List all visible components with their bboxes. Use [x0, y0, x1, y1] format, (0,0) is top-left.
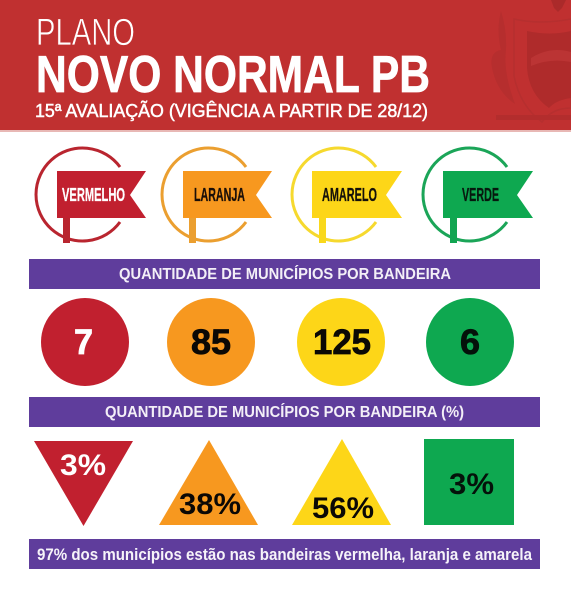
inverted triangle: vermelho 3%: 3% [60, 449, 106, 482]
icon: state coat of arms watermark [491, 0, 571, 122]
triangle: amarelo 56% [292, 439, 391, 525]
count circle: verde 6: 6 [460, 323, 480, 362]
square: verde 3%: 3% [449, 468, 494, 501]
count circle: verde 6 [426, 298, 514, 386]
triangle: laranja 38% [159, 440, 258, 525]
heading: PLANO: PLANO [36, 12, 135, 54]
triangle: amarelo 56%: 56% [312, 492, 374, 525]
flag badge: vermelho: VERMELHO [62, 185, 125, 205]
flag badge: amarelo [292, 148, 402, 243]
heading: NOVO NORMAL PB: NOVO NORMAL PB [36, 46, 430, 104]
section bar: percentage of municipalities: QUANTIDADE DE MUNICÍPIOS POR BANDEIRA (%) [105, 404, 464, 421]
subheading: evaluation date: 15ª AVALIAÇÃO (VIGÊNCIA A PARTIR DE 28/12) [35, 100, 428, 121]
flag badge: verde [423, 148, 533, 243]
flag badge: laranja: LARANJA [194, 185, 245, 205]
flag badge: laranja [162, 148, 272, 243]
count circle: vermelho 7: 7 [74, 323, 93, 362]
count circle: laranja 85 [167, 298, 255, 386]
count circle: vermelho 7 [41, 298, 129, 386]
callout bar: 97% summary [29, 539, 540, 569]
callout bar: 97% summary: 97% dos municípios estão nas bandeiras vermelha, laranja e amarela [37, 546, 533, 564]
square: verde 3% [424, 439, 514, 525]
section bar: count of municipalities: QUANTIDADE DE MUNICÍPIOS POR BANDEIRA [119, 266, 451, 283]
header banner [0, 0, 571, 132]
count circle: laranja 85: 85 [191, 323, 231, 362]
count circle: amarelo 125: 125 [313, 323, 371, 362]
section bar: percentage of municipalities [29, 397, 540, 427]
flag badge: verde: VERDE [462, 185, 499, 205]
count circle: amarelo 125 [297, 298, 385, 386]
triangle: laranja 38%: 38% [179, 488, 241, 521]
inverted triangle: vermelho 3% [34, 441, 133, 526]
flag badge: amarelo: AMARELO [322, 185, 377, 205]
flag badge: vermelho [36, 148, 146, 243]
section bar: count of municipalities [29, 259, 540, 289]
